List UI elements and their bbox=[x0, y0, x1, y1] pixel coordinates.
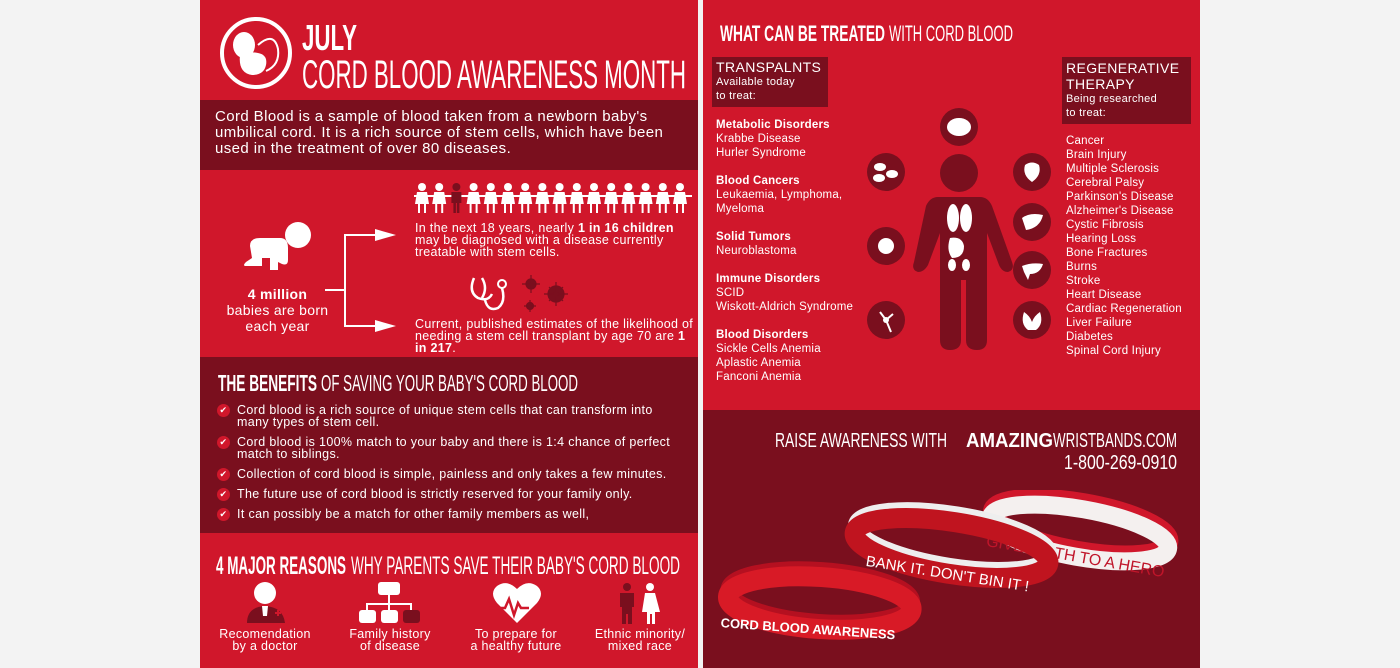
icon: children row bbox=[414, 183, 692, 213]
icon: family tree bbox=[359, 582, 420, 623]
wristbands: CORD BLOOD AWARENESS bbox=[720, 615, 896, 642]
box: transplants: to treat: bbox=[716, 90, 756, 102]
list: benefits: ✔ bbox=[220, 489, 227, 499]
list: benefits: The future use of cord blood is strictly reserved for your family only. bbox=[237, 487, 633, 501]
list: benefits: ✔ bbox=[220, 405, 227, 415]
list: regenerative: Parkinson's Disease bbox=[1066, 191, 1174, 203]
list: regenerative: Spinal Cord Injury bbox=[1066, 345, 1161, 357]
list: transplants: SCID bbox=[716, 287, 744, 299]
labels: reasons: To prepare for bbox=[475, 627, 557, 641]
list: regenerative: Alzheimer's Disease bbox=[1066, 205, 1174, 217]
icon: couple bbox=[620, 583, 660, 624]
panel: statistics bbox=[200, 170, 698, 357]
panel: raise awareness bbox=[703, 410, 1200, 668]
list: transplants: Wiskott-Aldrich Syndrome bbox=[716, 301, 853, 313]
title bbox=[302, 17, 686, 97]
text: raise awareness: RAISE AWARENESS WITH bbox=[775, 430, 947, 452]
text: raise awareness: AMAZING bbox=[966, 430, 1053, 452]
box: regenerative: to treat: bbox=[1066, 107, 1106, 119]
list: transplants: Fanconi Anemia bbox=[716, 371, 801, 383]
box: transplants bbox=[712, 57, 828, 107]
box: regenerative: REGENERATIVE bbox=[1066, 60, 1179, 76]
labels: reasons: by a doctor bbox=[232, 639, 298, 653]
list: regenerative: Cancer bbox=[1066, 135, 1104, 147]
icon: stethoscope and viruses bbox=[470, 275, 568, 312]
list: transplants: Blood Disorders bbox=[716, 329, 808, 341]
heading: benefits: THE BENEFITS bbox=[218, 370, 317, 396]
box: transplants: TRANSPALNTS bbox=[716, 59, 821, 75]
icon: heartbeat bbox=[493, 583, 541, 623]
wristbands: GIVE BIRTH TO A HERO bbox=[985, 533, 1166, 581]
text: 1 in 217: Current, published estimates of the likelihood of needing a stem cell transplant by age 70 are 1 in 217. bbox=[415, 317, 693, 355]
list: transplants: Myeloma bbox=[716, 203, 764, 215]
list: transplants: Metabolic Disorders bbox=[716, 119, 830, 131]
panel: left bbox=[200, 0, 698, 668]
labels: reasons: Ethnic minority/ bbox=[595, 627, 685, 641]
list: transplants: Aplastic Anemia bbox=[716, 357, 801, 369]
list: regenerative: Brain Injury bbox=[1066, 149, 1127, 161]
box: transplants: Available today bbox=[716, 76, 795, 88]
list: benefits: ✔ bbox=[220, 469, 227, 479]
list: regenerative: Burns bbox=[1066, 261, 1097, 273]
labels: reasons bbox=[219, 627, 685, 653]
list: transplants bbox=[716, 119, 853, 383]
icon: fetus bbox=[220, 17, 292, 89]
list: benefits: It can possibly be a match for other family members as well, bbox=[237, 507, 589, 521]
wristbands bbox=[718, 490, 1178, 642]
list: regenerative: Cardiac Regeneration bbox=[1066, 303, 1182, 315]
panel: benefits bbox=[200, 357, 698, 533]
intro text: Cord Blood is a sample of blood taken from a newborn baby's umbilical cord. It is a rich source of stem cells, which have been used in the treatment of over 80 diseases. bbox=[215, 108, 663, 157]
list: transplants: Leukaemia, Lymphoma, bbox=[716, 189, 842, 201]
text: 4 million babies: each year bbox=[245, 318, 310, 334]
labels: reasons: a healthy future bbox=[470, 639, 561, 653]
panel: 4 reasons bbox=[200, 533, 698, 668]
list: regenerative: Cystic Fibrosis bbox=[1066, 219, 1144, 231]
list: benefits: ✔ bbox=[220, 509, 227, 519]
list: regenerative: Hearing Loss bbox=[1066, 233, 1136, 245]
box: regenerative: THERAPY bbox=[1066, 76, 1135, 92]
text: 1 in 16: In the next 18 years, nearly 1 in 16 children may be diagnosed with a disease currently treatable with stem cells. bbox=[415, 221, 674, 259]
labels: reasons: Recomendation bbox=[219, 627, 311, 641]
panel: treatments bbox=[703, 0, 1200, 410]
list: regenerative: Heart Disease bbox=[1066, 289, 1141, 301]
text: 4 million babies: 4 million bbox=[248, 286, 307, 302]
text: 4 million babies: babies are born bbox=[227, 302, 328, 318]
wristbands: BANK IT. DON'T BIN IT ! bbox=[865, 553, 1030, 595]
list: regenerative: Stroke bbox=[1066, 275, 1100, 287]
list: transplants: Solid Tumors bbox=[716, 231, 791, 243]
figure: body with organ icons bbox=[867, 108, 1051, 350]
heading: 4 reasons bbox=[216, 552, 680, 578]
text: 4 million babies bbox=[227, 286, 328, 334]
list: transplants: Immune Disorders bbox=[716, 273, 820, 285]
list: regenerative bbox=[1066, 135, 1182, 357]
list: benefits: ✔ bbox=[220, 437, 227, 447]
list: regenerative: Liver Failure bbox=[1066, 317, 1132, 329]
heading: what can be treated: WHAT CAN BE TREATED bbox=[720, 21, 885, 46]
list: regenerative: Cerebral Palsy bbox=[1066, 177, 1144, 189]
list: benefits: Collection of cord blood is simple, painless and only takes a few minutes. bbox=[237, 467, 667, 481]
icon: baby bbox=[244, 222, 311, 270]
box: regenerative: Being researched bbox=[1066, 93, 1157, 105]
panel: right bbox=[703, 0, 1200, 668]
list: benefits: Cord blood is a rich source of unique stem cells that can transform into many types of stem cell. bbox=[237, 403, 653, 429]
intro text bbox=[200, 100, 698, 170]
list: benefits bbox=[217, 403, 670, 521]
title: JULY bbox=[302, 17, 357, 58]
box: regenerative bbox=[1062, 57, 1191, 124]
list: benefits: Cord blood is 100% match to your baby and there is 1:4 chance of perfect match to siblings. bbox=[237, 435, 670, 461]
header bbox=[200, 0, 698, 100]
arrows: bracket bbox=[325, 229, 396, 332]
list: transplants: Krabbe Disease bbox=[716, 133, 801, 145]
list: transplants: Hurler Syndrome bbox=[716, 147, 806, 159]
labels: reasons: Family history bbox=[349, 627, 431, 641]
list: regenerative: Bone Fractures bbox=[1066, 247, 1147, 259]
labels: reasons: mixed race bbox=[608, 639, 672, 653]
text: raise awareness bbox=[775, 430, 1177, 474]
heading: benefits bbox=[218, 370, 578, 396]
list: transplants: Sickle Cells Anemia bbox=[716, 343, 821, 355]
heading: what can be treated: WITH CORD BLOOD bbox=[889, 21, 1013, 46]
list: transplants: Neuroblastoma bbox=[716, 245, 797, 257]
labels: reasons: of disease bbox=[360, 639, 420, 653]
icon: doctor bbox=[247, 582, 285, 623]
list: transplants: Blood Cancers bbox=[716, 175, 800, 187]
list: regenerative: Diabetes bbox=[1066, 331, 1113, 343]
list: regenerative: Multiple Sclerosis bbox=[1066, 163, 1159, 175]
